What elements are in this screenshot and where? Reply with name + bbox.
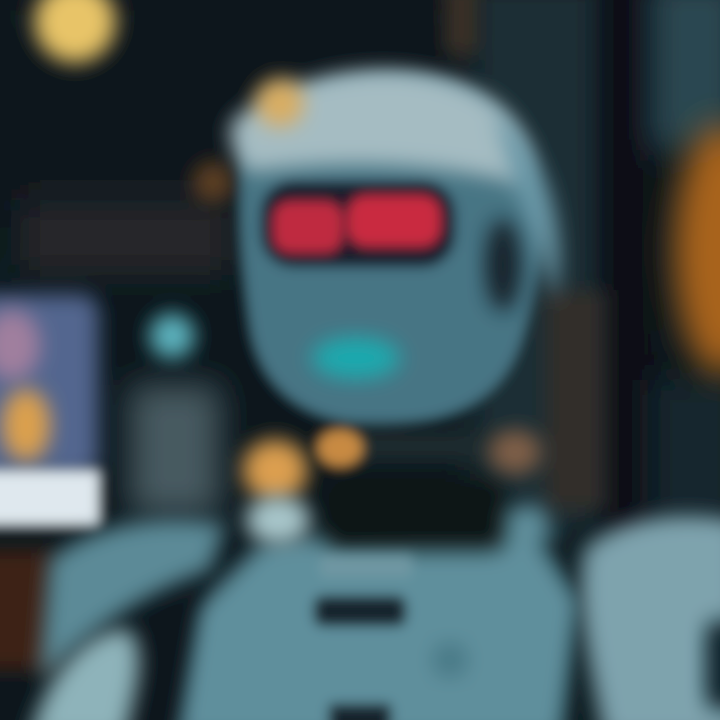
head base: [240, 74, 540, 426]
right side highlight: [495, 115, 559, 300]
ear: [485, 219, 521, 311]
left colourful panel: [0, 295, 100, 670]
chest dark blocks: [325, 478, 505, 550]
left body edge dark: [125, 575, 200, 720]
teal glow left of head: [150, 314, 194, 358]
red eye right: [346, 194, 442, 248]
right shoulder: [582, 516, 720, 720]
left arm: [30, 521, 225, 720]
bokeh: small orange light: [193, 162, 233, 202]
robot head: [231, 71, 559, 426]
robot body: [125, 428, 605, 720]
dome highlight: [231, 71, 530, 185]
neck: [345, 428, 505, 464]
orange glow at right edge: [674, 125, 720, 375]
right body edge dark: [540, 525, 605, 720]
visor: [262, 182, 454, 266]
bokeh: yellow light: [35, 0, 115, 62]
orange dome patch: [256, 79, 304, 127]
red eye left: [272, 200, 344, 254]
mouth: [312, 337, 400, 379]
warm lights near neck: [243, 428, 541, 544]
